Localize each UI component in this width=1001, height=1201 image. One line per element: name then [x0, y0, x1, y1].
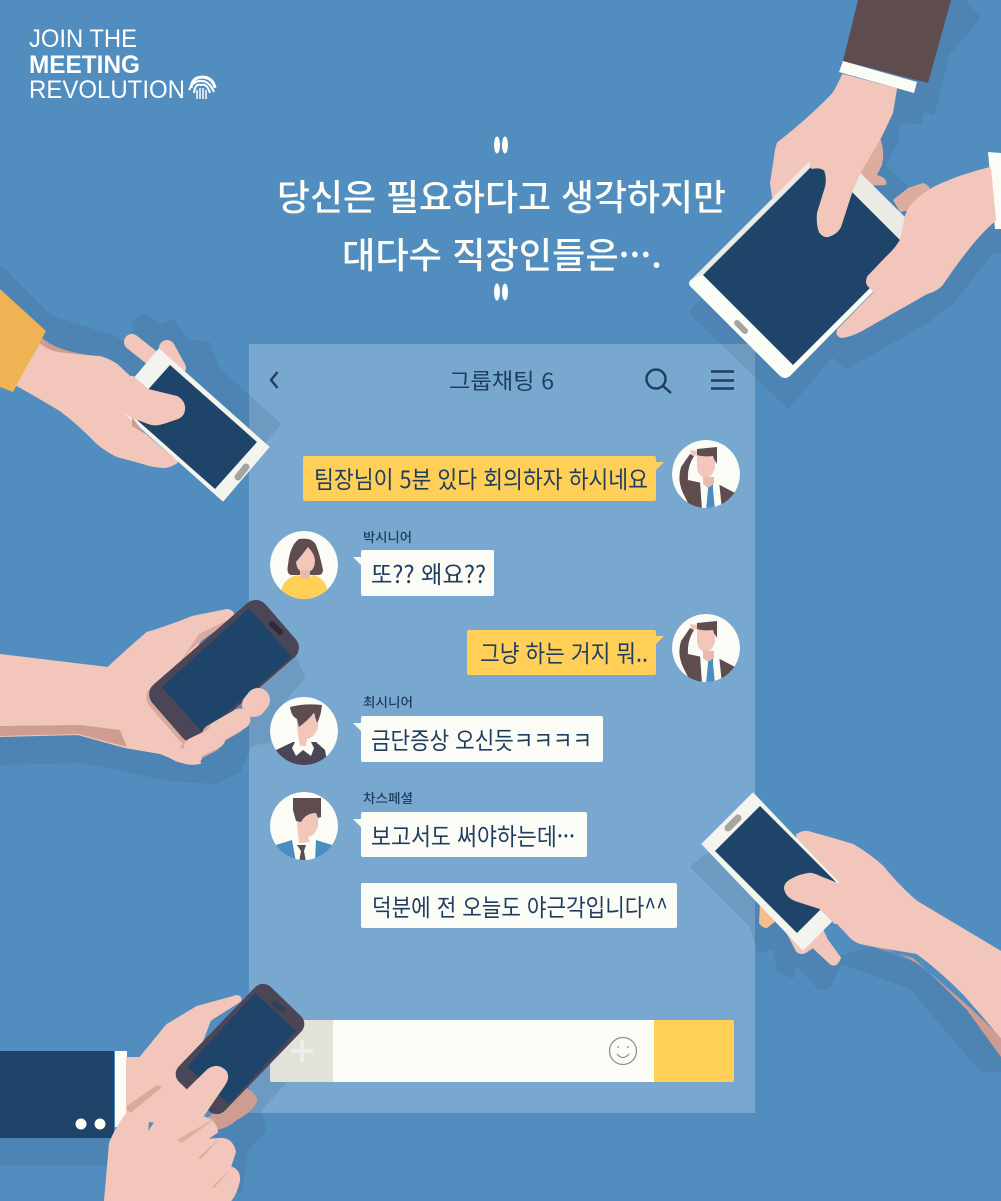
message: 덕분에: 덕분에 전 오늘도 야근각입니다^^ [372, 888, 668, 923]
shadow: lower-right hand and phone [694, 851, 1001, 1069]
icon: search [646, 370, 671, 393]
hand: middle left with phone [0, 595, 304, 764]
icon: plus [291, 1040, 313, 1062]
icon: fountain [189, 77, 215, 99]
logo: MEETING [29, 51, 140, 79]
upper hand behind tablet [771, 75, 860, 197]
message: 보고서도 [353, 812, 587, 857]
arm [0, 610, 233, 764]
back fingers [855, 138, 886, 186]
avatar: man in sweater [270, 697, 338, 767]
message: team leader 1: 팀장님이 5분 있다 회의하자 하시네요 [314, 460, 648, 495]
input bar [270, 1020, 734, 1082]
fingers behind phone [132, 342, 157, 362]
sleeve [0, 1051, 114, 1138]
background gap [148, 1122, 157, 1133]
palm behind [205, 1088, 257, 1130]
message: team leader 2: 그냥 하는 거지 뭐.. [480, 634, 648, 669]
name: 차스페셜: 차스페셜 [363, 788, 413, 807]
name: 박시니어: 박시니어 [363, 527, 412, 546]
message: 또?? 왜요?? [353, 550, 494, 596]
lower fingers [786, 925, 840, 965]
icon: smiley [610, 1038, 636, 1064]
thumb [105, 375, 184, 424]
cuff [839, 61, 917, 93]
message: 또?? 왜요??: 또?? 왜요?? [371, 555, 486, 590]
hand: lower right with phone [702, 793, 1001, 1057]
thumb [785, 874, 860, 923]
hand: bottom left with phone [0, 979, 309, 1201]
logo: JOIN THE [29, 25, 137, 53]
icon: menu [711, 372, 734, 388]
sleeve [0, 289, 46, 392]
message: 금단증상: 금단증상 오신듯ㅋㅋㅋㅋ [371, 721, 592, 756]
title: 대다수 직장인들은···. [342, 227, 662, 279]
avatar: woman [270, 531, 338, 600]
header: chat bar [271, 364, 734, 396]
palm [17, 345, 177, 467]
hand: upper left with phone [0, 289, 269, 501]
cuff [115, 1051, 127, 1127]
shadow: upper-left hand and phone [0, 268, 277, 457]
icon: back arrow [271, 372, 278, 388]
cuff buttons [76, 1118, 106, 1130]
shadow: middle-left hand and phone [0, 650, 302, 781]
arm shadow [38, 338, 97, 362]
lower hand [838, 168, 995, 337]
title [277, 136, 726, 300]
tablet [689, 142, 926, 378]
message: 보고서도: 보고서도 써야하는데··· [371, 817, 575, 852]
front hand [105, 1067, 239, 1201]
phone [141, 595, 304, 750]
right cuff [988, 152, 1001, 229]
back hand [127, 996, 241, 1132]
logo: REVOLUTION [29, 76, 185, 104]
hand [797, 832, 1001, 1037]
avatar: man scratching head 2 [672, 614, 740, 684]
avatar: man scratching head 1 [672, 440, 740, 510]
upper hand with index finger [800, 75, 896, 236]
opening quote [494, 136, 508, 154]
header: chat bar: 그룹채팅 6 [449, 364, 554, 396]
logo [29, 25, 215, 104]
fingers [168, 700, 258, 757]
message: 금단증상 [353, 716, 603, 762]
closing quote [494, 284, 508, 300]
name: 최시니어: 최시니어 [363, 692, 413, 711]
phone [113, 349, 269, 501]
sleeve [843, 0, 951, 83]
shadow: bottom-left sleeve and phone [0, 1020, 311, 1190]
title: 당신은 필요하다고 생각하지만 [277, 169, 726, 221]
panel: chat window [249, 344, 755, 1113]
phone [171, 979, 309, 1119]
phone [702, 793, 854, 950]
shadow: top-right hands and tablet [692, 0, 1001, 405]
hand: top right with tablet [689, 0, 1001, 378]
avatar: man with tie [270, 792, 338, 862]
arm dark edge [860, 943, 1001, 1057]
orange finger [759, 903, 777, 928]
